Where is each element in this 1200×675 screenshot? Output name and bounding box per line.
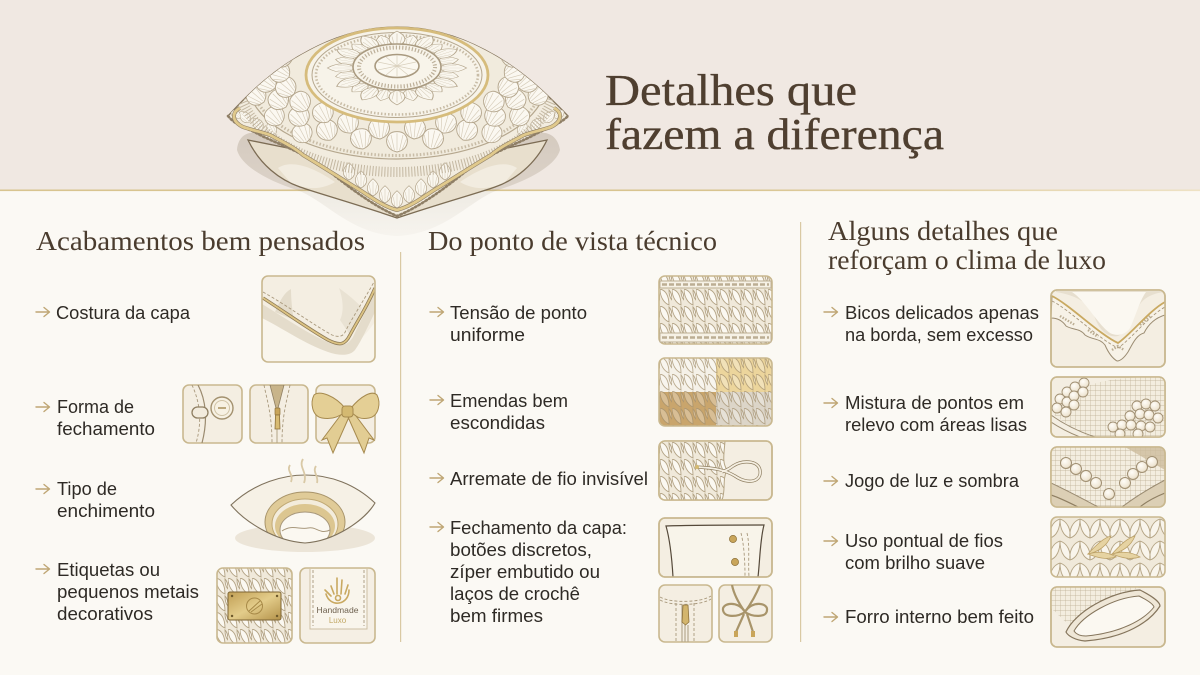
item: tipo de enchimento: Tipo de	[57, 478, 117, 499]
icon: hand	[325, 578, 349, 603]
illustration: crochet pillow	[226, 26, 569, 226]
bottom fan petals	[228, 107, 567, 208]
icon: hidden joins	[659, 358, 772, 426]
icon: relief stitches	[1051, 377, 1165, 439]
item: tensão: Tensão de ponto	[450, 302, 587, 323]
item: etiquetas: Etiquetas ou	[57, 559, 160, 580]
panel: ponto de vista técnico	[428, 226, 772, 642]
heading: luxo: reforçam o clima de luxo	[828, 245, 1106, 275]
central mandala	[306, 28, 488, 122]
title: Detalhes que	[605, 66, 857, 115]
item: forma de fechamento: Forma de	[57, 396, 134, 417]
item: etiquetas: pequenos metais	[57, 581, 199, 602]
icon: metal plate	[217, 568, 292, 643]
item: emendas: Emendas bem	[450, 390, 568, 411]
item: etiquetas: decorativos	[57, 603, 153, 624]
heading: acabamentos: Acabamentos bem pensados	[36, 226, 365, 256]
divider between columns 2 and 3	[800, 222, 801, 642]
item: luz e sombra: Jogo de luz e sombra	[845, 470, 1020, 491]
icon: zipper closure	[250, 385, 308, 443]
icon: filled pillow	[231, 459, 375, 552]
panel: clima de luxo	[824, 216, 1165, 647]
icon: lace edge	[1051, 290, 1165, 367]
item: emendas: escondidas	[450, 412, 545, 433]
item: fechamento da capa: botões discretos,	[450, 539, 592, 560]
item: tensão: uniforme	[450, 324, 525, 345]
icon: button closure	[183, 385, 242, 443]
item: fechamento da capa: bem firmes	[450, 605, 543, 626]
header gold rule	[0, 190, 1200, 191]
item: forro: Forro interno bem feito	[845, 606, 1034, 627]
shell row A	[270, 60, 525, 140]
icon: bow closure	[312, 385, 379, 453]
icon: yarn loop	[659, 441, 772, 500]
heading: luxo	[828, 216, 1106, 275]
icon: handmade label	[300, 568, 375, 643]
item: fios com brilho	[824, 530, 1003, 573]
icon: cover with buttons	[659, 518, 772, 577]
item: etiquetas	[36, 559, 199, 624]
item: bicos	[824, 302, 1039, 345]
item: fios com brilho: Uso pontual de fios	[845, 530, 1003, 551]
header band	[0, 0, 1200, 190]
icon: inner lining	[1051, 587, 1165, 647]
item: mistura: Mistura de pontos em	[845, 392, 1024, 413]
item: tipo de enchimento	[36, 478, 155, 521]
icon: zip detail	[659, 585, 712, 642]
divider between columns 1 and 2	[400, 252, 401, 642]
item: fios com brilho: com brilho suave	[845, 552, 985, 573]
item: tipo de enchimento: enchimento	[57, 500, 155, 521]
item: fechamento da capa	[430, 517, 627, 626]
heading: técnico: Do ponto de vista técnico	[428, 226, 717, 256]
item: mistura	[824, 392, 1027, 435]
icon: handmade label: Luxo	[329, 616, 347, 625]
shell row C	[246, 86, 548, 144]
panel: acabamentos	[36, 226, 379, 643]
icon: seam corner	[262, 276, 375, 362]
title: fazem a diferença	[605, 110, 944, 159]
item: tensão	[430, 302, 587, 345]
item: costura da capa: Costura da capa	[56, 302, 191, 323]
item: fechamento da capa: zíper embutido ou	[450, 561, 600, 582]
item: fechamento da capa: laços de crochê	[450, 583, 580, 604]
item: forma de fechamento: fechamento	[57, 418, 155, 439]
item: fechamento da capa: Fechamento da capa:	[450, 517, 627, 538]
shell row B	[256, 74, 538, 152]
item: bicos: Bicos delicados apenas	[845, 302, 1039, 323]
icon: uniform stitches	[659, 276, 772, 344]
icon: shiny yarn	[1051, 517, 1165, 577]
item: mistura: relevo com áreas lisas	[845, 414, 1027, 435]
icon: crochet bow	[719, 585, 772, 642]
icon: handmade label: Handmade	[316, 605, 359, 615]
icon: light and shadow	[1051, 447, 1165, 507]
item: bicos: na borda, sem excesso	[845, 324, 1033, 345]
heading: luxo: Alguns detalhes que	[828, 216, 1058, 246]
item: forma de fechamento	[36, 396, 155, 439]
item: emendas	[430, 390, 568, 433]
title	[605, 66, 944, 159]
item: arremate: Arremate de fio invisível	[450, 468, 648, 489]
